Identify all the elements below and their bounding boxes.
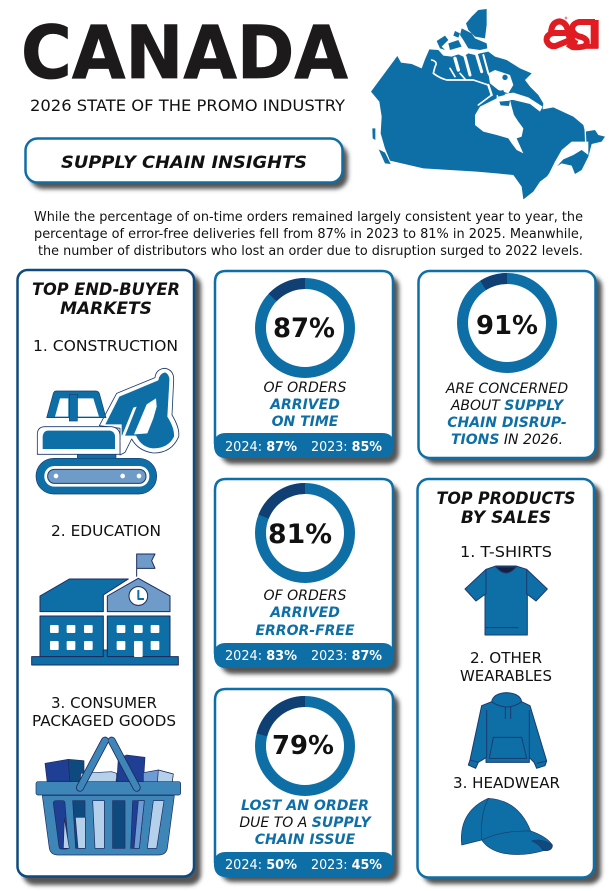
panel: top end-buyer markets (18, 270, 201, 885)
donut chart: 81% (260, 488, 350, 578)
panel: top products by sales (418, 479, 601, 884)
product 2 label: 2. OTHER (470, 649, 542, 667)
stat footer (214, 433, 394, 458)
stat caption: LOST AN ORDER (241, 798, 369, 814)
stat caption: ARRIVED (269, 397, 340, 413)
stat footer: 2024: 50% (225, 858, 297, 873)
panel heading: TOP END-BUYER (32, 280, 180, 300)
map of Canada (371, 9, 605, 199)
stat caption: ERROR-FREE (255, 623, 355, 639)
intro paragraph (34, 209, 583, 259)
card: arrived on time (214, 271, 399, 464)
panel heading: BY SALES (461, 508, 551, 528)
stat caption: ARRIVED (269, 605, 340, 621)
market 3 label: PACKAGED GOODS (32, 712, 176, 730)
panel heading: MARKETS (60, 299, 152, 319)
intro paragraph: the number of distributors who lost an order due to disruption surged to 2022 levels. (38, 243, 583, 259)
card: concerned about disruptions (418, 271, 602, 464)
product 2 label: WEARABLES (460, 667, 552, 685)
card: lost an order (214, 689, 399, 882)
stat footer (214, 852, 394, 877)
stat caption: DUE TO A SUPPLY (239, 815, 371, 831)
stat caption: TIONS IN 2026. (451, 432, 563, 448)
market 3 label: 3. CONSUMER (51, 694, 157, 712)
donut chart: 91%: 91% (476, 311, 538, 341)
stat caption: ON TIME (272, 414, 339, 430)
section heading: supply chain insights: SUPPLY CHAIN INSIGHTS (61, 153, 307, 173)
stat caption: ABOUT SUPPLY (451, 398, 563, 414)
stat footer: 2023: 87% (311, 649, 382, 664)
stat caption: CHAIN DISRUP- (447, 415, 567, 431)
map waterways (432, 55, 492, 105)
donut chart: 81%: 81% (268, 519, 332, 550)
card: arrived error-free (214, 479, 399, 674)
subtitle: 2026 STATE OF THE PROMO INDUSTRY (30, 96, 345, 115)
donut chart: 91% (462, 278, 552, 368)
market 1 label: 1. CONSTRUCTION (33, 337, 178, 355)
icon: excavator (36, 368, 179, 494)
stat footer: 2024: 87% (225, 440, 297, 455)
intro paragraph: percentage of error-free deliveries fell from 87% in 2023 to 81% in 2025. Meanwhile, (34, 226, 583, 242)
icon: school (32, 554, 178, 665)
icon: shopping basket (36, 741, 181, 855)
intro paragraph: While the percentage of on-time orders remained largely consistent year to year, the (34, 209, 583, 225)
stat footer: 2023: 45% (311, 858, 382, 873)
stat caption: OF ORDERS (264, 380, 347, 396)
donut chart: 87%: 87% (273, 313, 335, 344)
stat footer: 2024: 83% (225, 649, 297, 664)
product 3 label: 3. HEADWEAR (453, 774, 560, 792)
stat footer (214, 643, 394, 668)
donut chart: 79%: 79% (272, 731, 334, 761)
ASI logo (547, 17, 598, 48)
stat caption: CHAIN ISSUE (255, 832, 356, 848)
donut chart: 79% (260, 702, 350, 790)
title: CANADA (21, 11, 348, 96)
stat caption: OF ORDERS (264, 588, 347, 604)
section heading: supply chain insights (26, 138, 348, 189)
icon: hoodie (468, 693, 547, 768)
stat footer: 2023: 85% (311, 440, 382, 455)
panel heading: TOP PRODUCTS (436, 489, 576, 509)
stat caption: ARE CONCERNED (445, 381, 568, 397)
product 1 label: 1. T-SHIRTS (460, 543, 552, 561)
donut chart: 87% (260, 284, 350, 372)
icon: t-shirt (465, 566, 547, 635)
icon: baseball cap (461, 798, 552, 855)
market 2 label: 2. EDUCATION (51, 522, 161, 540)
